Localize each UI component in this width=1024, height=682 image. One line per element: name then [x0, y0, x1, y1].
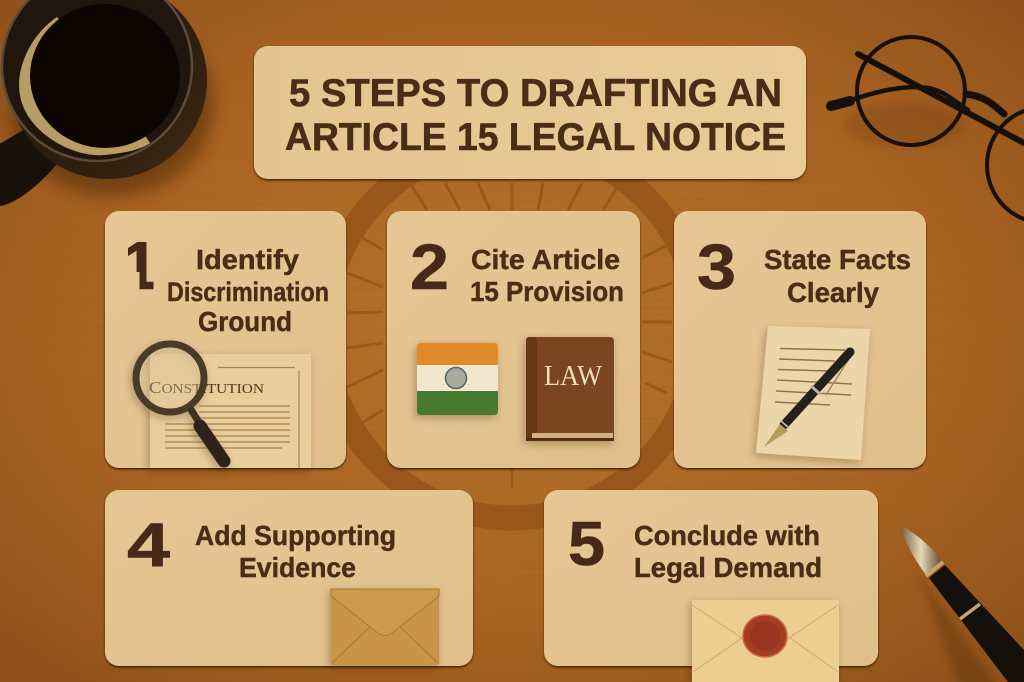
- step 4 heading: Evidence: [239, 552, 356, 583]
- document: constitution: [149, 354, 311, 468]
- step 5 heading: Legal Demand: [634, 552, 822, 583]
- step 4 heading: Add Supporting: [195, 520, 396, 551]
- icon: envelope: [331, 589, 439, 665]
- step 2 heading: [470, 244, 624, 307]
- step 2 heading: 15 Provision: [470, 276, 624, 307]
- document: constitution: CONSTITUTION: [149, 378, 264, 397]
- panel: step 5: [544, 490, 878, 682]
- panel: step 4: [105, 490, 473, 666]
- step 3 heading: [764, 244, 911, 308]
- icon: fountain pen: [764, 352, 852, 447]
- step 1 number: 1: [121, 228, 159, 304]
- step 3 heading: Clearly: [787, 277, 879, 308]
- step 1 heading: Ground: [198, 306, 292, 337]
- mug handle: [0, 126, 66, 206]
- fountain pen, bottom right: [900, 525, 1024, 682]
- step 5 heading: [634, 520, 822, 583]
- step 1 heading: Discrimination: [167, 277, 329, 307]
- icon: note page: [756, 326, 870, 460]
- step 3 heading: State Facts: [764, 244, 911, 275]
- icon: envelope with wax seal: [692, 600, 839, 682]
- coffee mug: [0, 0, 214, 206]
- icon: law book: [526, 337, 614, 441]
- title panel: [254, 46, 806, 179]
- step 3 number: 3: [697, 231, 736, 303]
- step 5 heading: Conclude with: [634, 520, 820, 551]
- panel: step 2: [387, 211, 640, 468]
- glasses: [831, 37, 1024, 223]
- icon: law book: LAW: [544, 361, 603, 392]
- title panel: ARTICLE 15 LEGAL NOTICE: [285, 116, 786, 159]
- step 5 number: 5: [568, 510, 605, 579]
- step 1 heading: Identify: [196, 244, 299, 275]
- step 4 number: 4: [127, 511, 171, 580]
- panel: step 3: [674, 211, 926, 468]
- icon: magnifying glass: [136, 344, 224, 461]
- title: 5 STEPS TO DRAFTING AN: [289, 72, 782, 115]
- faded Ashoka chakra on the desk: [324, 142, 700, 518]
- panel: step 1: [105, 211, 346, 468]
- step 1 heading: [167, 244, 329, 337]
- step 4 heading: [195, 520, 396, 583]
- step 2 number: 2: [410, 231, 449, 303]
- step 2 heading: Cite Article: [471, 244, 620, 275]
- icon: Indian flag: [417, 343, 498, 415]
